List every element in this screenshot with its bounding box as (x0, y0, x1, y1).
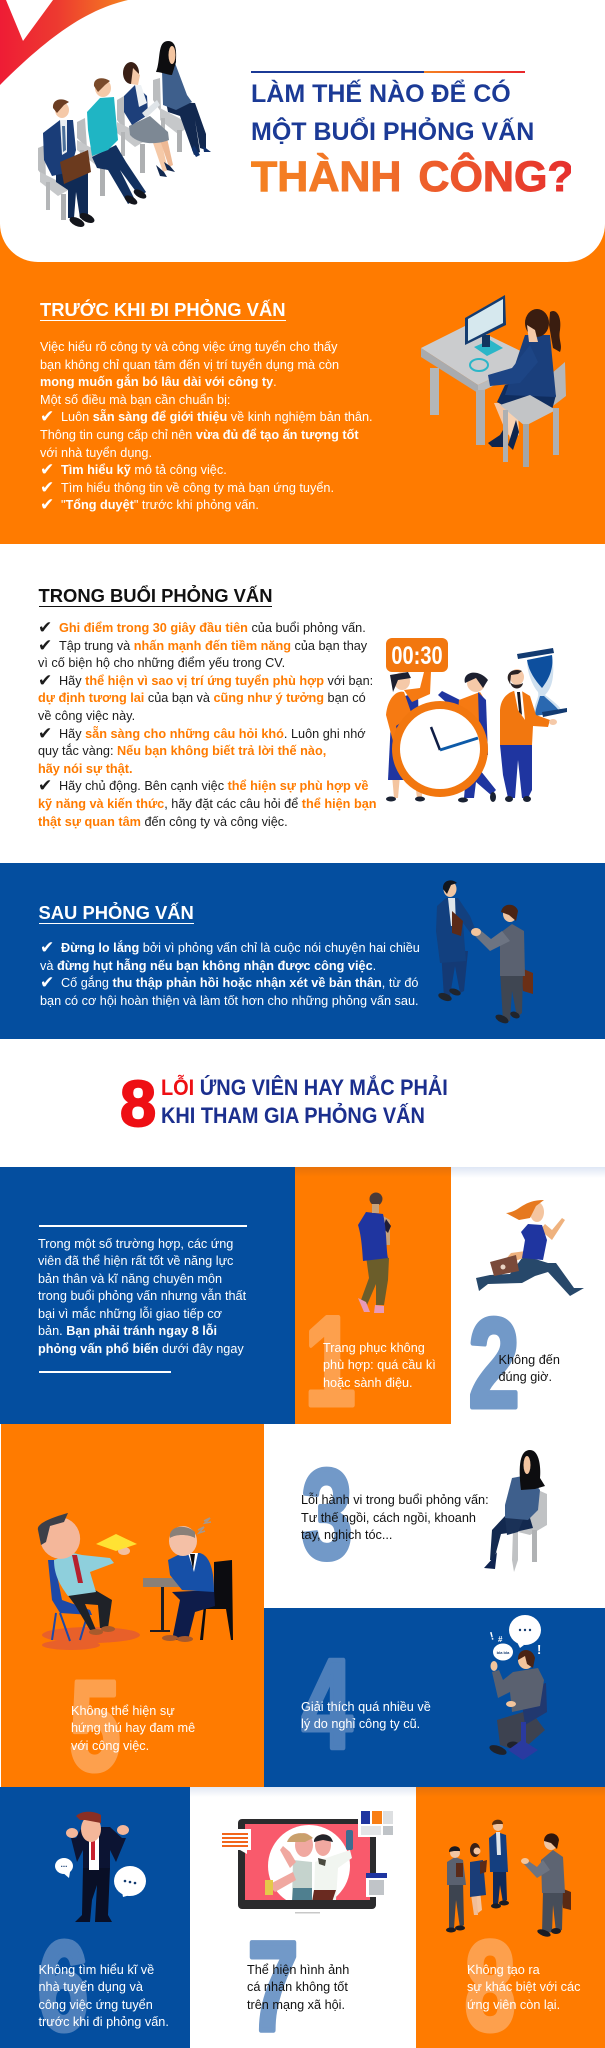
icon: group of candidates (446, 1820, 571, 1937)
text block: interview tips: Hãy sẵn sàng cho những câu hỏi khó. Luôn ghi nhớ (59, 727, 366, 741)
illustration: four candidates waiting on chairs (38, 41, 211, 227)
decorative title rule (251, 71, 525, 73)
decorative top rule (39, 1225, 247, 1227)
text block: preparation checklist (40, 340, 373, 515)
text block: preparation checklist: Tìm hiểu kỹ mô tả công việc. (61, 463, 227, 477)
middle person (464, 770, 496, 798)
text block: interview tips: quy tắc vàng: Nếu bạn không biết trả lời thế nào, (38, 744, 326, 758)
text: mistake 2: đúng giờ. (498, 1370, 552, 1384)
text block: intro: bản thân và kĩ năng chuyên môn (38, 1272, 222, 1286)
text block: intro: viên đã thể hiện rất tốt về năng lực (38, 1254, 233, 1268)
panel: mistake 6 (0, 1787, 190, 2048)
text block: intro: trong buổi phỏng vấn nhưng vẫn thất (38, 1289, 246, 1303)
seated woman with folder (117, 96, 125, 130)
number 3: 3 (302, 1444, 352, 1586)
text: mistake 8: sự khác biệt với các (467, 1980, 580, 1994)
text block: interview tips: ✔ (38, 636, 52, 656)
text: mistake 5 (71, 1704, 195, 1753)
title: LÀM THẾ NÀO ĐỂ CÓ (251, 80, 511, 108)
text: mistake 4: Giải thích quá nhiều về (301, 1700, 431, 1714)
panel: mistake 2 (451, 1167, 605, 1424)
icon: shrugging man with speech bubbles: ... (61, 1860, 67, 1869)
panel: mistake 4 (264, 1608, 605, 1787)
text block: interview tips: Hãy chủ động. Bên cạnh việc thể hiện sự phù hợp về (59, 779, 368, 793)
panel: mistake 5 (1, 1424, 264, 1787)
text block: interview tips: ✔ (38, 618, 52, 638)
text block: preparation checklist: Thông tin cung cấp chỉ nên vừa đủ để tạo ấn tượng tốt (40, 428, 359, 442)
icon: tablet showing party photo on social media (222, 1811, 393, 1914)
text block: interview tips: dự định tương lai của bạn và cũng như ý tưởng bạn có (38, 691, 366, 705)
panel: section after the interview (0, 862, 605, 1039)
text: mistake 4 (301, 1700, 431, 1731)
text: mistake 8: ứng viên còn lại. (467, 1998, 560, 2012)
text: mistake 1: Trang phục không (323, 1340, 425, 1354)
text: mistake 6: công việc ứng tuyển (38, 1998, 153, 2012)
text block: interview tips: về công việc này. (38, 709, 135, 723)
text: mistake 7: cá nhân không tốt (247, 1980, 348, 1994)
text block: interview tips: hãy nói sự thật. (38, 762, 132, 776)
illustration: people with clock, timer and hourglass: 00:30 (391, 642, 443, 670)
icon: woman running with briefcase (476, 1200, 584, 1296)
text block: follow-up tips: ✔ (40, 973, 54, 993)
panel: mistake 1 (295, 1167, 451, 1424)
text block: interview tips: Hãy thể hiện vì sao vị trí ứng tuyển phù hợp với bạn: (59, 674, 373, 688)
icon: talkative man with speech bubbles: ! (537, 1642, 541, 1657)
text block: interview tips: kỹ năng và kiến thức, hãy đặt các câu hỏi để thể hiện bạn (38, 797, 377, 811)
text: mistake 2: Không đến (498, 1352, 560, 1366)
text: mistake 1: phù hợp: quá cầu kì (323, 1358, 436, 1372)
text block: preparation checklist: ✔ (40, 407, 54, 427)
panel: mistake 8 (416, 1787, 605, 2048)
text block: interview tips (38, 618, 377, 829)
heading: 8 mistakes candidates often make (120, 1067, 448, 1140)
heading: after the interview: SAU PHỎNG VẤN (38, 902, 194, 922)
text block: preparation checklist: với nhà tuyển dụng. (40, 446, 152, 460)
text block: follow-up tips: ✔ (40, 938, 54, 958)
text: mistake 3: tay, nghịch tóc... (301, 1528, 392, 1542)
panel: mistake 7 (190, 1787, 416, 2048)
text block: intro (38, 1236, 246, 1356)
text block: preparation checklist: Tìm hiểu thông tin về công ty mà bạn ứng tuyển. (61, 481, 334, 495)
text: mistake 6 (38, 1962, 169, 2029)
heading: 8 mistakes candidates often make: KHI THAM GIA PHỎNG VẤN (161, 1103, 425, 1128)
rear woman (153, 78, 161, 112)
decorative bottom rule (39, 1371, 171, 1372)
text: mistake 5: với công việc. (71, 1739, 149, 1753)
text: mistake 6: nhà tuyển dụng và (38, 1980, 143, 1994)
text: mistake 3: Tư thế ngồi, cách ngồi, khoanh (301, 1511, 476, 1525)
text block: intro: bại vì mắc những lỗi giao tiếp cơ (38, 1307, 222, 1321)
text: mistake 2 (498, 1352, 560, 1384)
illustration: woman at desk with computer (421, 295, 566, 467)
text: mistake 1: hoặc sành điệu. (323, 1376, 413, 1390)
text block: preparation checklist: ✔ (40, 495, 54, 515)
icon: talkative man with speech bubbles: # (498, 1635, 503, 1644)
heading: 8 mistakes candidates often make: LỖI ỨNG VIÊN HAY MẮC PHẢI (161, 1075, 448, 1100)
text block: follow-up tips (40, 938, 420, 1008)
title: MỘT BUỔI PHỎNG VẤN (251, 118, 534, 146)
number 2: 2 (469, 1293, 519, 1435)
text block: interview tips: ✔ (38, 776, 52, 796)
text block: interview tips: ✔ (38, 724, 52, 744)
text block: interview tips: vì cố biện hộ cho những điểm yếu trong CV. (38, 656, 285, 670)
text: mistake 3: Lỗi hành vi trong buổi phỏng vấn: (301, 1493, 489, 1507)
icon: shrugging man with speech bubbles (55, 1812, 146, 1922)
left person (392, 775, 400, 798)
text block: preparation checklist: Một số điều mà bạn cần chuẩn bị: (40, 393, 230, 407)
illustration: two men shaking hands (436, 880, 533, 1024)
bearded man (500, 745, 532, 798)
text: mistake 3 (301, 1492, 489, 1542)
hourglass (527, 655, 562, 716)
icon: man walking with phone (358, 1192, 391, 1313)
icon: talkative man with speech bubbles: bla bla (497, 1650, 510, 1655)
text block: preparation checklist: Luôn sẵn sàng để giới thiệu về kinh nghiệm bản thân. (61, 410, 373, 424)
text: mistake 6: trước khi đi phỏng vấn. (38, 2015, 169, 2029)
illustration: interviewer and bored candidate (38, 1513, 233, 1650)
text block: preparation checklist: bạn không chỉ quan tâm đến vị trí tuyển dụng mà còn (40, 358, 339, 372)
text block: preparation checklist: mong muốn gắn bó lâu dài với công ty. (40, 375, 277, 389)
number 1: 1 (305, 1291, 355, 1433)
text: mistake 6: Không tìm hiểu kĩ về (38, 1962, 154, 1976)
text block: intro: bản. Bạn phải tránh ngay 8 lỗi (38, 1324, 217, 1338)
logo: red and orange swoosh (0, 0, 128, 85)
text block: preparation checklist: "Tổng duyệt" trước khi phỏng vấn. (61, 498, 259, 512)
text block: follow-up tips: Cố gắng thu thập phản hồi hoặc nhận xét về bản thân, từ đó (61, 976, 418, 990)
panel: mistake 3 (264, 1424, 605, 1608)
text: mistake 4: lý do nghỉ công ty cũ. (301, 1717, 420, 1731)
heading: during the interview: TRONG BUỔI PHỎNG VẤN (38, 584, 272, 606)
text block: interview tips: Tập trung và nhấn mạnh đến tiềm năng của bạn thay (59, 639, 367, 653)
text: mistake 5: Không thể hiện sự (71, 1704, 175, 1718)
text block: follow-up tips: và đừng hụt hẫng nếu bạn không nhận được công việc. (40, 959, 376, 973)
text: mistake 7 (247, 1962, 349, 2012)
title (251, 80, 574, 201)
man in suit with briefcase (38, 145, 46, 180)
man in cyan sweater (77, 118, 87, 148)
text: mistake 7: trên mạng xã hội. (247, 1998, 345, 2012)
number 4: 4 (302, 1634, 352, 1776)
text: mistake 5: hứng thú hay đam mê (71, 1721, 195, 1735)
text block: interview tips: Ghi điểm trong 30 giây đầu tiên của buổi phỏng vấn. (59, 621, 366, 635)
icon: seated woman (484, 1450, 547, 1572)
icon: talkative man with speech bubbles: ! (489, 1630, 495, 1643)
heading: before the interview: TRƯỚC KHI ĐI PHỎNG VẤN (40, 299, 286, 320)
text: mistake 7: Thể hiện hình ảnh (247, 1962, 349, 1976)
panel: title header (0, 0, 605, 262)
illustration: people with clock, timer and hourglass (386, 638, 567, 802)
text block: interview tips: ✔ (38, 671, 52, 691)
clock (396, 705, 484, 793)
text: mistake 8 (467, 1962, 580, 2012)
text block: follow-up tips: Đừng lo lắng bởi vì phỏng vấn chỉ là cuộc nói chuyện hai chiều (61, 941, 420, 955)
text block: follow-up tips: bạn có cơ hội hoàn thiện và làm tốt hơn cho những phỏng vấn sau. (40, 994, 419, 1008)
text block: interview tips: thật sự quan tâm đến công ty và công việc. (38, 815, 288, 829)
text block: preparation checklist: ✔ (40, 460, 54, 480)
number 5: 5 (70, 1656, 120, 1798)
heading: 8 mistakes candidates often make: 8 (120, 1067, 156, 1140)
text: mistake 1 (323, 1340, 436, 1390)
icon: talkative man with speech bubbles (489, 1615, 547, 1760)
panel: section before the interview (0, 220, 605, 544)
text block: preparation checklist: ✔ (40, 478, 54, 498)
text block: intro: phỏng vấn phổ biến dưới đây ngay (38, 1342, 244, 1356)
panel: intro to the 8 mistakes (0, 1167, 295, 1424)
timer sign (386, 638, 448, 672)
panel: section during the interview (0, 545, 605, 862)
text block: intro: Trong một số trường hợp, các ứng (38, 1236, 233, 1250)
title: THÀNH CÔNG? (251, 153, 574, 201)
text block: preparation checklist: Việc hiểu rõ công ty và công việc ứng tuyển cho thấy (40, 340, 337, 354)
text: mistake 8: Không tạo ra (467, 1962, 540, 1976)
